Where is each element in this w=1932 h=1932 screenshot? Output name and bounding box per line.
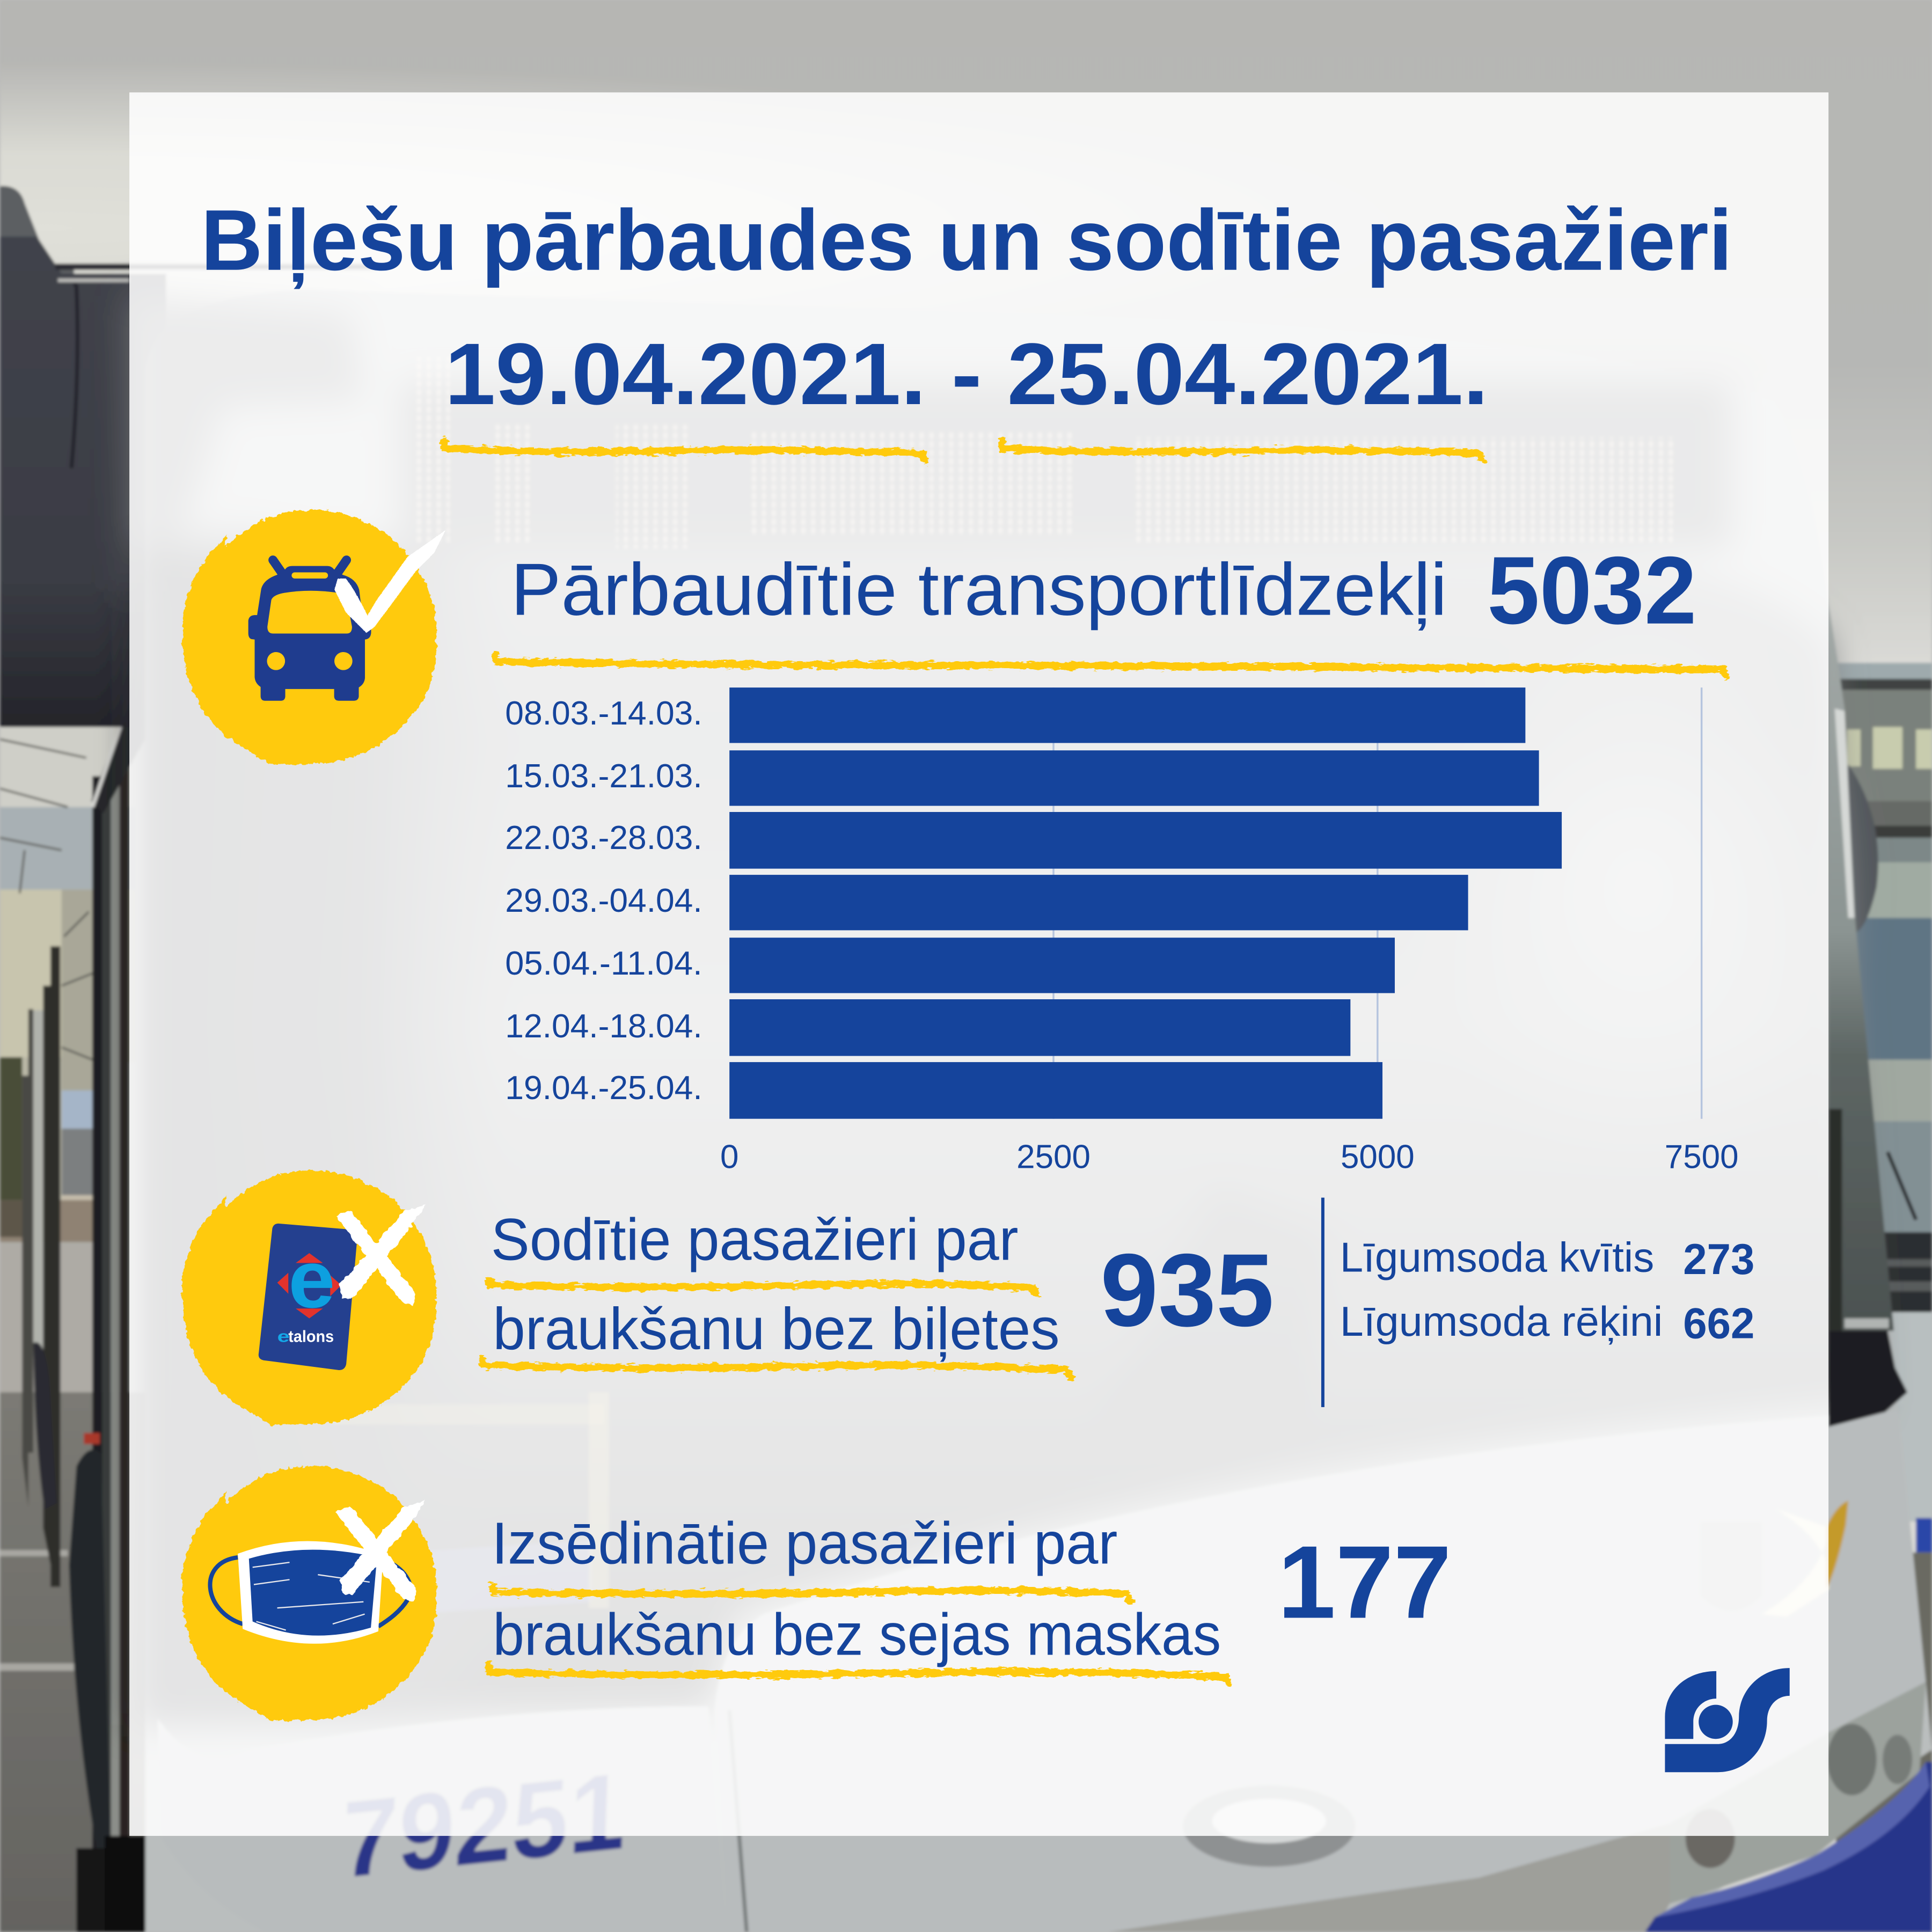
icon: yellow brush circle — [182, 510, 436, 764]
text: removed passengers label: braukšanu bez sejas maskas — [493, 1601, 1221, 1667]
title: Biļešu pārbaudes un sodītie pasažieri — [201, 193, 1732, 290]
icon: white check mark — [334, 530, 445, 633]
text: fined passengers label: Sodītie pasažieri par — [491, 1207, 1019, 1273]
bars — [729, 687, 1562, 1119]
text: removed passengers label — [492, 1511, 1221, 1667]
icon: face mask — [210, 1541, 411, 1644]
panel: checked vehicles icon — [182, 510, 445, 764]
lower front panel ghost — [715, 1411, 1926, 1932]
lights — [1670, 1682, 1926, 1904]
axis labels: 0 — [720, 1139, 738, 1176]
number: checked vehicles: 5032 — [1487, 537, 1696, 644]
icon: yellow brush circle — [182, 1170, 436, 1424]
breakdown: penalty invoices: Līgumsoda rēķini — [1340, 1298, 1663, 1345]
bumper seam — [1109, 1824, 1670, 1932]
panel: fined passengers icon — [182, 1170, 436, 1424]
bus emblems — [1762, 1509, 1829, 1616]
bus body — [145, 290, 1932, 1932]
date range: 19.04.2021. - 25.04.2021. — [445, 325, 1488, 423]
blue bumper — [1645, 1762, 1932, 1932]
destination sign dots — [413, 357, 1675, 548]
week labels — [505, 695, 702, 1107]
axis labels: 7500 — [1665, 1139, 1739, 1176]
breakdown: penalty receipts: Līgumsoda kvītis — [1340, 1233, 1654, 1280]
icon: white cross — [335, 1501, 425, 1602]
text: removed passengers label: Izsēdinātie pasažieri par — [492, 1511, 1117, 1577]
side mirror — [0, 186, 376, 727]
other bus on the right — [1836, 663, 1932, 1932]
axis labels: 5000 — [1341, 1139, 1415, 1176]
week labels: 15.03.-21.03. — [505, 758, 702, 795]
white translucent panel — [129, 92, 1828, 1836]
text: fined passengers label: braukšanu bez biļetes — [493, 1296, 1059, 1362]
bus brand badge — [1183, 1785, 1356, 1867]
week labels: 29.03.-04.04. — [505, 882, 702, 919]
logo — [1665, 1668, 1790, 1772]
windscreen base and wiper — [1828, 1331, 1907, 1427]
week labels: 08.03.-14.03. — [505, 695, 702, 732]
icon: yellow brush circle — [182, 1466, 436, 1720]
axis labels — [720, 1139, 1739, 1176]
bar chart: checked vehicles per week — [505, 687, 1739, 1176]
soft windscreen and reflections under the panel — [129, 296, 1873, 1725]
number: removed passengers: 177 — [1278, 1524, 1452, 1640]
week labels: 22.03.-28.03. — [505, 819, 702, 857]
ground and buildings on the left — [0, 717, 160, 1932]
fleet number: 79251 — [339, 1750, 628, 1901]
axis labels: 2500 — [1016, 1139, 1091, 1176]
week labels: 05.04.-11.04. — [505, 945, 702, 982]
icon: white cross — [335, 1205, 425, 1306]
icon: e-talons card — [259, 1224, 357, 1370]
icon: e-talons card: talons — [288, 1327, 334, 1345]
week labels: 12.04.-18.04. — [505, 1008, 702, 1045]
icon: trolleybus — [248, 560, 371, 701]
breakdown: penalty receipts: 273 — [1683, 1235, 1754, 1284]
icon: e-talons card: e — [277, 1327, 290, 1345]
text: fined passengers label — [491, 1207, 1059, 1362]
yellow brush underlines — [444, 441, 1726, 1685]
number: fined passengers: 935 — [1100, 1232, 1274, 1348]
breakdown: penalty invoices: 662 — [1683, 1299, 1754, 1348]
windscreen pillar — [1828, 604, 1894, 1331]
panel: removed passengers icon — [182, 1466, 436, 1720]
week labels: 19.04.-25.04. — [505, 1070, 702, 1107]
heading: checked vehicles: Pārbaudītie transportlīdzekļi — [511, 548, 1447, 631]
icon: e-talons card: e — [288, 1234, 335, 1325]
divider line — [1321, 1198, 1324, 1407]
